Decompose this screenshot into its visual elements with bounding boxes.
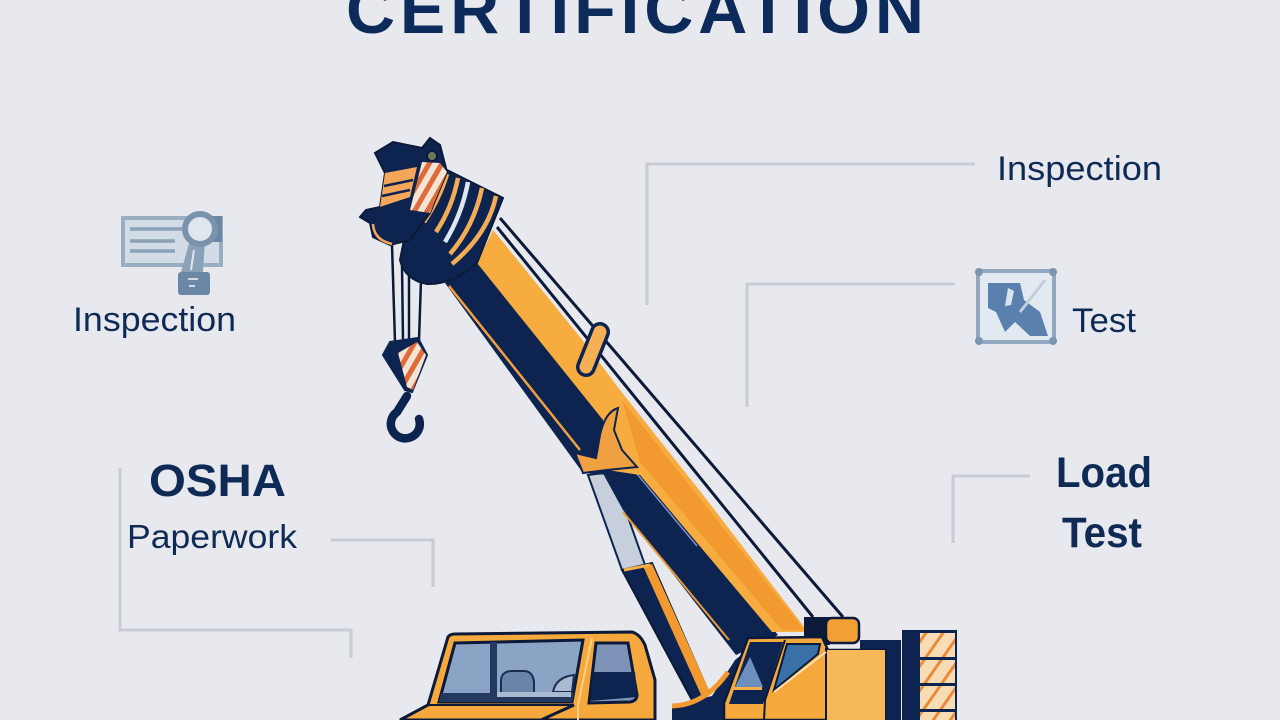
icon: test photo frame [975,268,1057,345]
truck cab rear block [804,617,830,645]
icon: inspection document with magnifier [123,214,222,295]
label: test: Test [1072,302,1137,340]
upper boom stripe [449,286,580,450]
windshield lower band [439,693,574,702]
label: inspection right: Inspection [997,150,1162,188]
boom cables [497,218,843,617]
sheave ribs [424,174,496,264]
label: inspection left: Inspection [73,301,236,339]
head pin [427,151,437,161]
clamp inner [586,332,600,367]
rear navy block [860,640,901,720]
windshield [439,640,583,702]
door line [578,638,592,720]
boom highlight [622,400,804,630]
upper boom navy [445,260,610,475]
windshield pillar [490,642,497,702]
label: OSHA: OSHA [149,455,286,506]
hook [391,396,420,438]
boom clamp [586,332,600,367]
label: load test: Test [1062,509,1142,557]
lower cylinder [622,563,709,702]
hydraulic rod [588,472,645,570]
counterweight [902,630,957,720]
hood line [541,705,574,720]
side window [589,643,637,703]
label: paperwork: Paperwork [127,518,298,555]
head frame [360,138,447,245]
lower boom navy [600,468,778,655]
head orange panel [373,167,417,244]
cable roller [826,618,859,643]
label: load test [1056,449,1152,557]
seat [501,671,534,695]
truck cab [400,632,655,720]
operator cab [724,637,885,720]
crane illustration [360,138,957,720]
hoist ropes [392,245,421,342]
connector lines [120,164,1030,658]
label: load test: Load [1056,449,1152,497]
boom head sheaves [400,170,503,284]
boom yellow [477,230,808,632]
turret base [672,640,760,720]
head striped panel [410,162,447,213]
boom elbow [575,408,637,473]
hook block [383,338,427,392]
